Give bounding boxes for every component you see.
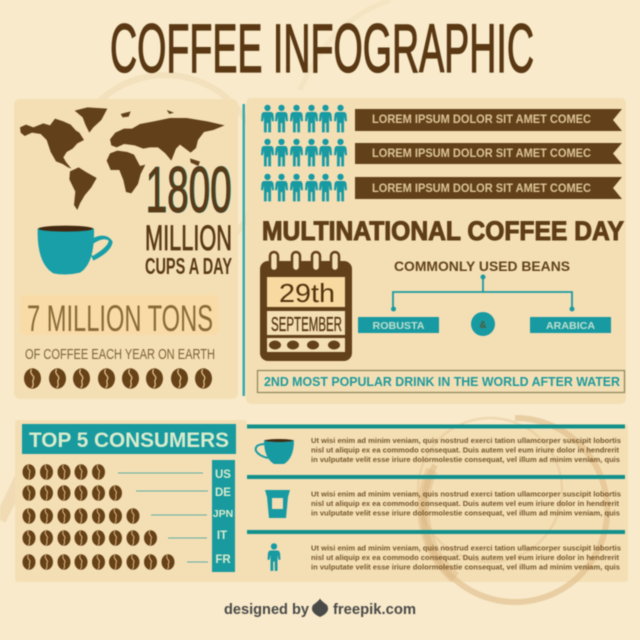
chart: consumers bean rows (22, 464, 174, 570)
text block 2: in vulputate velit esse iriure dolormolestie consequat, vel illum ad minim veniam, quis (311, 508, 620, 518)
number 1800: 1800 (146, 153, 232, 226)
heading: commonly used beans: COMMONLY USED BEANS (394, 259, 570, 274)
icon: calendar: 29th (279, 278, 335, 308)
panel: top right (246, 98, 626, 404)
number 1800 front: 1800 (146, 153, 232, 226)
ribbon banners: LOREM IPSUM DOLOR SIT AMET COMEC (372, 183, 591, 195)
ribbon banners (355, 109, 622, 199)
text block 1: in vulputate velit esse iriure dolormolestie consequat, vel illum ad minim veniam, quis (311, 455, 620, 464)
footer credit: designed by (224, 601, 310, 618)
tree connector (391, 274, 574, 312)
text block 1: Ut wisi enim ad minim veniam, quis nostrud exerci tation ullamcorper suscipit lobortis (311, 436, 621, 445)
icon: freepik logo (312, 598, 328, 617)
text block 1: nisl ut aliquip ex ea commodo consequat. Duis autem vel eum iriure dolor in hendrerit (311, 446, 619, 454)
panel: top left (14, 99, 238, 399)
icon: takeaway cup (265, 490, 290, 518)
label cups a day: CUPS A DAY (145, 253, 232, 279)
callout: 2nd most popular drink (258, 370, 624, 392)
label: ampersand circle: & (479, 320, 487, 331)
country labels column: US (215, 469, 231, 481)
teal divider lines (247, 426, 625, 532)
vertical divider (242, 104, 245, 396)
ribbon banners: LOREM IPSUM DOLOR SIT AMET COMEC (372, 114, 591, 126)
header: top 5 consumers: TOP 5 CONSUMERS (29, 428, 229, 452)
stat: 1800 million cups a day (145, 153, 232, 279)
country labels column (212, 460, 235, 572)
panel: bottom left (15, 420, 247, 582)
text block 2: nisl ut aliquip ex ea commodo consequat. Duis autem vel eum iriure dolor in hendrerit (311, 499, 619, 508)
text block 3: in vulputate velit esse iriure dolormolestie consequat, vel illum ad minim veniam, quis (311, 562, 620, 572)
icon: world map (20, 107, 225, 210)
text block 2 (311, 490, 621, 518)
icon: small cup (256, 439, 294, 464)
label: robusta: ROBUSTA (372, 320, 425, 332)
icon: teal coffee cup (38, 226, 113, 275)
country labels column: DE (215, 487, 231, 499)
row US (22, 464, 105, 480)
bean row: seven million tons (24, 368, 212, 389)
label: arabica: ARABICA (546, 320, 595, 332)
stain overlay rings (418, 418, 607, 602)
footer credit (224, 598, 416, 618)
icon: rows of people (261, 105, 347, 201)
text block 3: Ut wisi enim ad minim veniam, quis nostrud exerci tation ullamcorper suscipit lobortis (311, 544, 621, 552)
text block 1 (311, 436, 621, 464)
text block 3: nisl ut aliquip ex ea commodo consequat. Duis autem vel eum iriure dolor in hendrerit (311, 553, 619, 562)
panel: bottom right (240, 424, 628, 582)
label million: MILLION (145, 219, 232, 258)
row FR (22, 554, 174, 570)
icon: calendar: SEPTEMBER (271, 314, 342, 336)
label: ampersand circle (471, 312, 495, 336)
country labels column: JPN (213, 508, 233, 520)
callout: 7 million tons: 7 MILLION TONS (27, 298, 213, 339)
icon: person (268, 543, 280, 571)
leader lines (118, 473, 208, 562)
country labels column: IT (217, 530, 227, 542)
icon: calendar (260, 252, 352, 361)
row JPN (22, 508, 140, 524)
calendar rings (270, 252, 339, 271)
country labels column: FR (215, 554, 231, 566)
coffee stains (0, 0, 390, 520)
callout: 7 million tons (20, 295, 219, 339)
ribbon banners: LOREM IPSUM DOLOR SIT AMET COMEC (372, 148, 591, 160)
row IT (22, 530, 157, 546)
text block 3 (311, 544, 621, 572)
label: arabica (530, 317, 611, 333)
text: of coffee each year: OF COFFEE EACH YEAR ON EARTH (25, 346, 215, 363)
callout: 2nd most popular drink: 2ND MOST POPULAR DRINK IN THE WORLD AFTER WATER (264, 374, 621, 389)
label: robusta (358, 317, 439, 333)
row DE (22, 485, 122, 501)
footer credit: freepik.com (333, 601, 416, 618)
text block 2: Ut wisi enim ad minim veniam, quis nostrud exerci tation ullamcorper suscipit lobortis (311, 490, 621, 498)
